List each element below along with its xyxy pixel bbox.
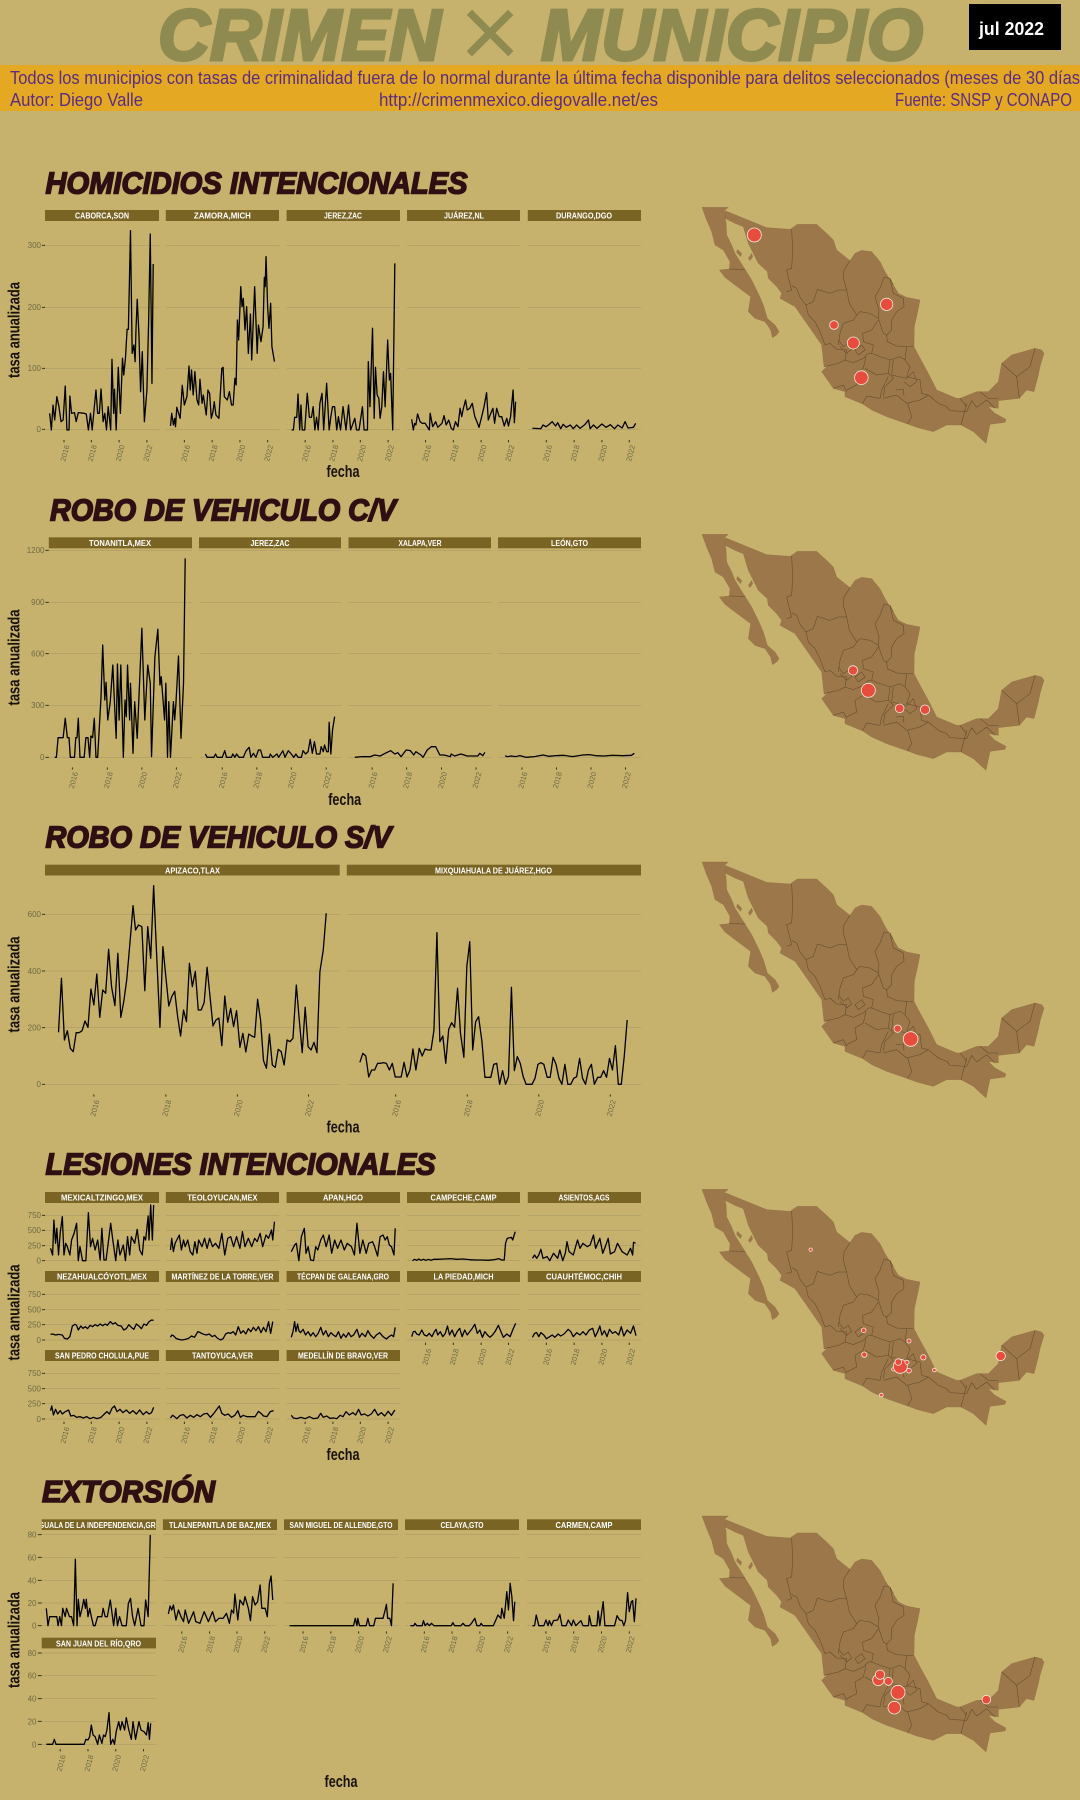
section: robo de vehiculo c/v	[4, 492, 641, 809]
y axis labels: 200	[28, 303, 42, 312]
panel: San Juan del Río: SAN JUAN DEL RÍO,QRO	[56, 1638, 141, 1648]
y axis labels: 0	[37, 1415, 42, 1424]
x axis labels: 2016	[67, 771, 80, 789]
title	[158, 0, 923, 91]
x axis labels: 2022	[605, 1099, 618, 1117]
x axis labels: 2016	[58, 444, 71, 462]
panel: Jerez	[199, 537, 341, 757]
y axis title: tasa anualizada	[4, 609, 24, 706]
x axis labels: 2020	[353, 1635, 366, 1654]
map: robo s/v	[702, 862, 1044, 1098]
panel: Juárez: JUÁREZ,NL	[444, 211, 484, 221]
x axis labels: 2018	[401, 771, 414, 789]
y axis labels: 0	[37, 425, 42, 434]
x axis labels: 2020	[234, 1426, 247, 1444]
y axis title: tasa anualizada	[4, 282, 24, 378]
subtitle band	[0, 65, 1080, 111]
x axis labels: 2022	[171, 771, 184, 789]
x axis labels: 2018	[448, 444, 461, 462]
x axis labels: 2018	[207, 1426, 220, 1444]
panel: Campeche: CAMPECHE,CAMP	[430, 1193, 497, 1203]
panel: León: LEÓN,GTO	[551, 537, 588, 548]
y axis labels: 0	[32, 1622, 37, 1631]
x axis labels: 2020	[110, 1754, 123, 1772]
x axis labels: 2018	[327, 1426, 340, 1444]
panel: Carmen	[527, 1519, 641, 1626]
x axis labels: 2020	[596, 444, 609, 462]
heading: lesiones: LESIONES INTENCIONALES	[46, 1146, 436, 1182]
x axis labels: 2016	[217, 771, 230, 789]
x axis labels: 2016	[390, 1099, 403, 1117]
panel: Campeche	[407, 1192, 520, 1261]
x axis labels: 2018	[327, 444, 340, 462]
y axis labels: 80	[28, 1531, 37, 1540]
x axis labels: 2016	[541, 1348, 554, 1366]
y axis labels: 0	[40, 753, 45, 762]
x axis title: fecha	[326, 462, 360, 481]
x axis labels	[67, 771, 633, 789]
heading: robo c/v: ROBO DE VEHICULO C/V	[50, 492, 398, 528]
x axis labels: 2020	[596, 1635, 609, 1654]
y axis labels: 500	[28, 1306, 42, 1314]
panel: Caborca: CABORCA,SON	[75, 211, 129, 221]
x axis labels: 2016	[420, 1348, 433, 1366]
x axis labels: 2018	[568, 1635, 581, 1654]
x axis labels: 2022	[503, 1348, 516, 1366]
map: lesiones	[702, 1189, 1044, 1425]
x axis labels: 2018	[446, 1635, 459, 1654]
x axis labels: 2016	[541, 444, 554, 462]
x axis labels: 2016	[420, 444, 433, 462]
panel: Juárez	[407, 210, 520, 430]
panel: Martínez de la Torre	[166, 1271, 279, 1340]
x axis labels: 2016	[88, 1099, 101, 1117]
panel: La Piedad	[407, 1271, 520, 1337]
y axis labels: 60	[28, 1553, 37, 1562]
y axis labels: 200	[28, 1024, 42, 1032]
x axis labels	[55, 1635, 637, 1772]
y axis labels: 80	[28, 1649, 37, 1658]
x axis title: fecha	[328, 790, 362, 809]
x axis labels: 2016	[179, 1426, 192, 1444]
subtitle band: Autor: Diego Valle	[10, 90, 143, 110]
panel: Apizaco: APIZACO,TLAX	[165, 865, 220, 875]
x axis labels: 2022	[262, 1426, 275, 1444]
x axis labels: 2016	[300, 444, 313, 462]
x axis labels: 2022	[624, 1348, 637, 1366]
map: extorsión	[702, 1516, 1044, 1752]
panel: Tlalnepantla	[163, 1519, 277, 1623]
x axis labels: 2022	[138, 1754, 151, 1772]
panel: Iguala: IGUALA DE LA INDEPENDENCIA,GRO	[37, 1520, 161, 1530]
section: extorsión	[4, 1474, 641, 1791]
panel: Iguala	[37, 1519, 161, 1626]
x axis labels: 2018	[251, 771, 264, 789]
x axis labels: 2022	[141, 1426, 154, 1444]
y axis labels: 600	[31, 650, 45, 658]
x axis labels: 2018	[325, 1635, 338, 1654]
panel: Celaya	[405, 1519, 519, 1626]
x axis labels: 2020	[596, 1348, 609, 1366]
x axis labels: 2016	[176, 1635, 189, 1654]
y axis labels: 100	[28, 364, 42, 373]
x axis labels: 2020	[474, 1635, 487, 1654]
panel: Teoloyucan	[166, 1192, 279, 1255]
panel: San Pedro Cholula: SAN PEDRO CHOLULA,PUE	[55, 1351, 149, 1361]
y axis labels: 300	[28, 241, 42, 250]
x axis labels: 2022	[303, 1099, 316, 1117]
y axis labels: 1200	[27, 546, 45, 555]
panel: Jerez: JEREZ,ZAC	[250, 538, 290, 548]
y axis labels: 40	[28, 1695, 37, 1704]
x axis title: fecha	[324, 1772, 358, 1791]
heading: homicidios: HOMICIDIOS INTENCIONALES	[46, 166, 468, 200]
panel: Caborca	[45, 210, 159, 430]
y axis labels	[27, 546, 45, 762]
y axis title: tasa anualizada	[4, 936, 24, 1032]
panel: Mixquiahuala	[347, 865, 641, 1084]
x axis labels: 2016	[366, 771, 379, 789]
y axis labels: 60	[28, 1672, 37, 1681]
subtitle band: http://crimenmexico.diegovalle.net/es	[379, 90, 658, 110]
panel: Carmen: CARMEN,CAMP	[556, 1520, 613, 1530]
y axis labels: 20	[28, 1717, 37, 1726]
panel: Medellín de Bravo	[287, 1350, 400, 1419]
x axis labels: 2018	[448, 1348, 461, 1366]
x axis labels: 2020	[355, 444, 368, 462]
panel: San Miguel de Allende	[284, 1519, 398, 1626]
x axis labels: 2020	[585, 771, 598, 789]
x axis labels: 2018	[462, 1099, 475, 1117]
panel: Tonanitla	[49, 537, 192, 757]
panel: Zamora: ZAMORA,MICH	[194, 211, 251, 221]
y axis labels: 750	[28, 1211, 42, 1220]
y axis labels: 900	[31, 598, 45, 607]
x axis labels: 2020	[232, 1099, 245, 1117]
x axis labels: 2022	[383, 444, 396, 462]
x axis labels: 2022	[624, 1635, 637, 1654]
panel: Tantoyuca	[166, 1350, 279, 1419]
x axis labels: 2018	[551, 771, 564, 789]
x axis labels: 2020	[476, 444, 489, 462]
panel: Tlalnepantla: TLALNEPANTLA DE BAZ,MEX	[169, 1520, 271, 1530]
y axis labels: 250	[28, 1320, 42, 1330]
section: robo de vehiculo s/v	[4, 820, 641, 1136]
panel: Durango	[528, 210, 641, 429]
panel: Mexicaltzingo	[45, 1192, 159, 1261]
x axis labels: 2018	[86, 444, 99, 462]
x axis labels: 2020	[136, 771, 149, 789]
x axis labels	[58, 444, 637, 462]
x axis labels: 2018	[160, 1099, 173, 1117]
y axis labels	[28, 1211, 42, 1424]
x axis labels: 2020	[533, 1099, 546, 1117]
y axis labels: 0	[32, 1740, 37, 1749]
x axis labels: 2016	[419, 1635, 432, 1654]
x axis labels: 2018	[82, 1754, 95, 1772]
y axis labels	[28, 910, 42, 1089]
x axis labels: 2022	[470, 771, 483, 789]
y axis labels: 750	[28, 1290, 42, 1299]
panel: Apan: APAN,HGO	[323, 1193, 363, 1203]
x axis labels: 2018	[204, 1635, 217, 1654]
panel: Martínez de la Torre: MARTÍNEZ DE LA TORRE,VER	[172, 1272, 274, 1282]
panel: Zamora	[166, 210, 279, 427]
x axis labels: 2020	[436, 771, 449, 789]
date badge	[969, 4, 1061, 50]
map: robo c/v	[702, 534, 1044, 770]
x axis labels: 2016	[516, 771, 529, 789]
x axis labels: 2020	[234, 444, 247, 462]
panel: Medellín de Bravo: MEDELLÍN DE BRAVO,VER	[298, 1351, 388, 1361]
panel: Técpan de Galeana	[287, 1271, 400, 1339]
panel: San Juan del Río	[42, 1638, 156, 1744]
x axis labels: 2022	[383, 1426, 396, 1444]
y axis labels: 0	[37, 1256, 42, 1266]
y axis labels	[28, 241, 42, 434]
panel: Xalapa: XALAPA,VER	[398, 538, 442, 548]
y axis labels: 250	[28, 1242, 42, 1250]
y axis labels: 600	[28, 910, 42, 919]
x axis labels: 2022	[259, 1635, 272, 1654]
section: lesiones intencionales	[4, 1146, 641, 1464]
y axis labels: 20	[28, 1599, 37, 1608]
x axis title: fecha	[326, 1118, 360, 1136]
panel: Jerez	[287, 210, 400, 430]
x axis labels: 2016	[300, 1426, 313, 1444]
x axis labels: 2022	[381, 1635, 394, 1654]
x axis labels: 2016	[179, 444, 192, 462]
panel: Teoloyucan: TEOLOYUCAN,MEX	[187, 1193, 258, 1203]
date badge: jul 2022	[978, 19, 1044, 39]
x axis labels: 2020	[355, 1426, 368, 1444]
panel: Mixquiahuala: MIXQUIAHUALA DE JUÁREZ,HGO	[435, 865, 552, 875]
x axis labels: 2022	[502, 1635, 515, 1654]
y axis title: tasa anualizada	[4, 1592, 24, 1688]
panel: Cuauhtémoc	[528, 1271, 641, 1339]
panel: Celaya: CELAYA,GTO	[440, 1520, 484, 1530]
y axis labels: 400	[28, 967, 42, 976]
panel: Tonanitla: TONANITLA,MEX	[89, 538, 151, 548]
panel: Asientos: ASIENTOS,AGS	[558, 1193, 610, 1203]
y axis labels: 250	[28, 1400, 42, 1408]
heading: robo s/v: ROBO DE VEHICULO S/V	[46, 820, 394, 854]
y axis labels: 300	[31, 701, 45, 710]
panel: La Piedad: LA PIEDAD,MICH	[434, 1272, 494, 1282]
y axis labels: 0	[37, 1336, 42, 1345]
y axis labels: 500	[28, 1384, 42, 1394]
x axis labels: 2020	[114, 444, 127, 462]
panel: León	[498, 537, 641, 757]
x axis labels: 2018	[569, 1348, 582, 1366]
panel: Cuauhtémoc: CUAUHTÉMOC,CHIH	[546, 1272, 622, 1282]
panel: Xalapa	[348, 537, 491, 757]
x axis labels: 2022	[141, 444, 154, 462]
x axis labels	[88, 1099, 618, 1117]
x axis labels: 2016	[58, 1426, 71, 1444]
panel: Durango: DURANGO,DGO	[556, 211, 612, 221]
x axis labels: 2020	[286, 771, 299, 789]
x axis title: fecha	[326, 1445, 360, 1464]
x axis labels: 2016	[55, 1754, 68, 1772]
y axis labels: 40	[28, 1576, 37, 1585]
y axis labels: 500	[28, 1226, 42, 1235]
y axis labels: 0	[37, 1080, 42, 1089]
x axis labels: 2020	[114, 1426, 127, 1444]
x axis labels: 2022	[262, 444, 275, 462]
panel: Mexicaltzingo: MEXICALTZINGO,MEX	[61, 1193, 143, 1203]
panel: Apan	[287, 1192, 400, 1261]
section: homicidios intencionales	[4, 166, 641, 481]
x axis labels: 2022	[503, 444, 516, 462]
panel: Nezahualcóyotl: NEZAHUALCÓYOTL,MEX	[57, 1271, 147, 1282]
panel: Nezahualcóyotl	[45, 1271, 159, 1339]
x axis labels: 2016	[297, 1635, 310, 1654]
y axis labels	[28, 1531, 37, 1749]
y axis title: tasa anualizada	[4, 1264, 24, 1360]
map: homicidios	[702, 207, 1044, 443]
x axis labels: 2018	[207, 444, 220, 462]
x axis labels: 2022	[321, 771, 334, 789]
y axis labels: 750	[28, 1369, 42, 1378]
panel: San Pedro Cholula	[45, 1350, 159, 1419]
panel: San Miguel de Allende: SAN MIGUEL DE ALLENDE,GTO	[290, 1520, 393, 1530]
x axis labels: 2018	[102, 771, 115, 789]
x axis labels: 2020	[231, 1635, 244, 1654]
x axis labels	[58, 1348, 637, 1444]
heading: extorsión: EXTORSIÓN	[42, 1474, 216, 1509]
x axis labels: 2022	[624, 444, 637, 462]
x axis labels: 2018	[86, 1426, 99, 1444]
panel: Tantoyuca: TANTOYUCA,VER	[192, 1351, 253, 1361]
x axis labels: 2016	[540, 1635, 553, 1654]
panel: Técpan de Galeana: TÉCPAN DE GALEANA,GRO	[297, 1272, 389, 1282]
x axis labels: 2022	[620, 771, 633, 789]
panel: Jerez: JEREZ,ZAC	[324, 211, 362, 221]
x axis labels: 2020	[476, 1348, 489, 1366]
panel: Asientos	[528, 1192, 641, 1261]
panel: Apizaco	[45, 865, 340, 1068]
x axis labels: 2018	[569, 444, 582, 462]
